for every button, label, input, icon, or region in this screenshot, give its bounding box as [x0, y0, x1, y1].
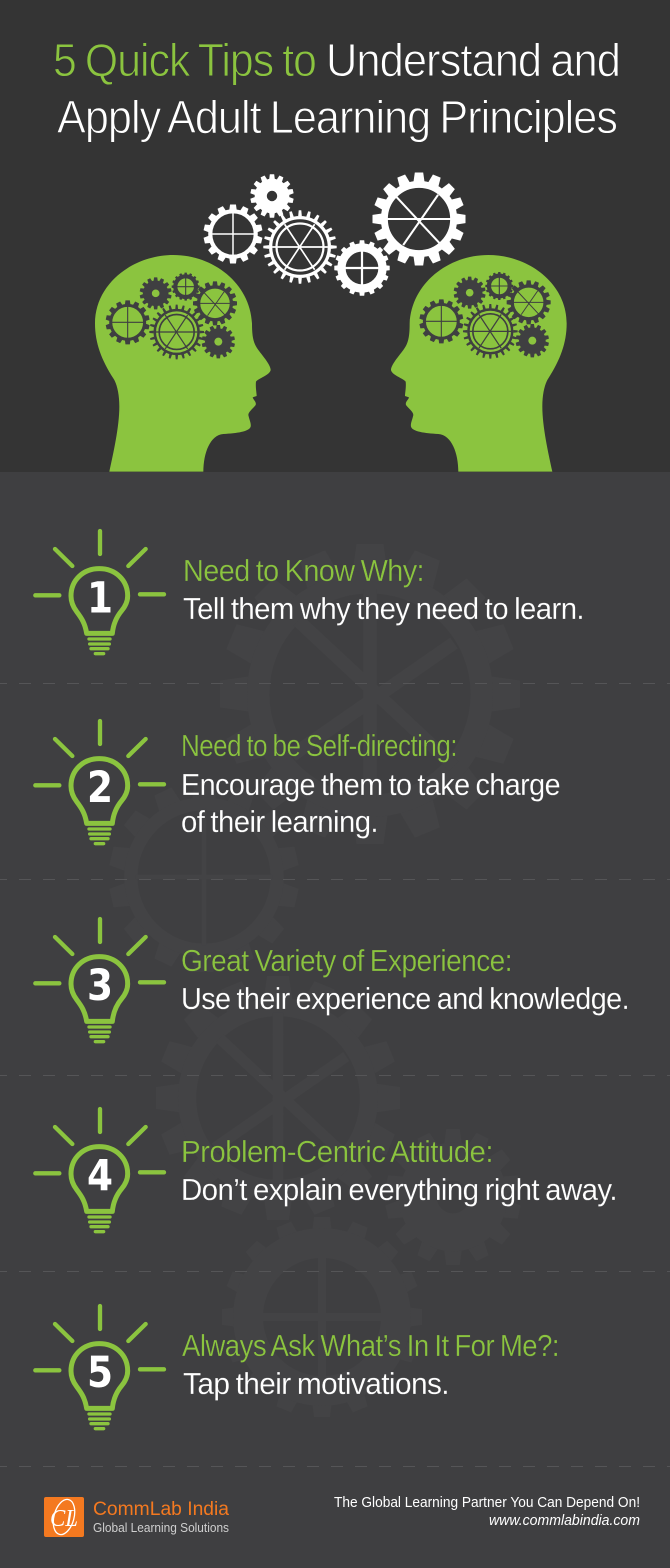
footer logo: Global Learning Solutions: [93, 1521, 229, 1535]
icon: light bulb 2: 2: [87, 763, 113, 813]
tip 3 text: [181, 944, 629, 1016]
tip 3 text: Use their experience and knowledge.: [181, 982, 629, 1016]
tip 1 text: Tell them why they need to learn.: [183, 592, 584, 626]
tip 3 text: Great Variety of Experience:: [181, 944, 512, 978]
tip 2 text: [181, 729, 560, 839]
icon: light bulb 5: 5: [87, 1348, 113, 1398]
tip 1: [35, 531, 584, 654]
tip 5: [35, 1306, 559, 1429]
icon: light bulb 3: 3: [87, 961, 113, 1011]
tip 5 text: Tap their motivations.: [183, 1367, 449, 1401]
watermark gears: [53, 417, 647, 1502]
icon: light bulb 3: [35, 919, 164, 1042]
tip 1 text: Need to Know Why:: [183, 554, 424, 588]
icon: light bulb 1: 1: [87, 574, 113, 624]
panel: header background: [0, 0, 670, 472]
footer logo: CommLab India: [93, 1499, 229, 1520]
icon: light bulb 1: [35, 531, 164, 654]
tip 4 text: Don’t explain everything right away.: [181, 1173, 617, 1207]
panel: page background: [0, 472, 670, 1568]
title: Understand and: [326, 34, 620, 86]
icon: light bulb 4: [35, 1109, 164, 1232]
icon: light bulb 5: [35, 1306, 164, 1429]
tip 3: [35, 919, 629, 1042]
footer tagline: www.commlabindia.com: [489, 1513, 640, 1529]
footer logo: [44, 1497, 229, 1537]
right head: [391, 255, 569, 472]
tip 4: [35, 1109, 617, 1232]
tip 4 text: [181, 1135, 617, 1207]
tip 5 text: Always Ask What’s In It For Me?:: [182, 1329, 559, 1363]
icon: CommLab logo mark: CL: [50, 1506, 78, 1532]
tip 2 text: Need to be Self-directing:: [181, 729, 457, 763]
tip 5 text: [182, 1329, 559, 1401]
tip 2 text: of their learning.: [181, 805, 378, 839]
icon: light bulb 2: [35, 721, 164, 844]
floating white gears: [203, 133, 505, 319]
tip 2 text: Encourage them to take charge: [181, 768, 560, 802]
tip 1 text: [183, 554, 584, 626]
title: [53, 34, 620, 143]
tip 4 text: Problem-Centric Attitude:: [181, 1135, 493, 1169]
left head: [95, 255, 271, 472]
illustration: two heads with gears: [95, 133, 569, 472]
tip 2: [35, 721, 560, 844]
footer tagline: [334, 1495, 640, 1529]
icon: light bulb 4: 4: [87, 1151, 113, 1201]
footer tagline: The Global Learning Partner You Can Depend On!: [334, 1495, 640, 1511]
icon: CommLab logo mark: [44, 1497, 84, 1537]
title: 5 Quick Tips to: [53, 34, 316, 86]
title: Apply Adult Learning Principles: [57, 91, 617, 143]
